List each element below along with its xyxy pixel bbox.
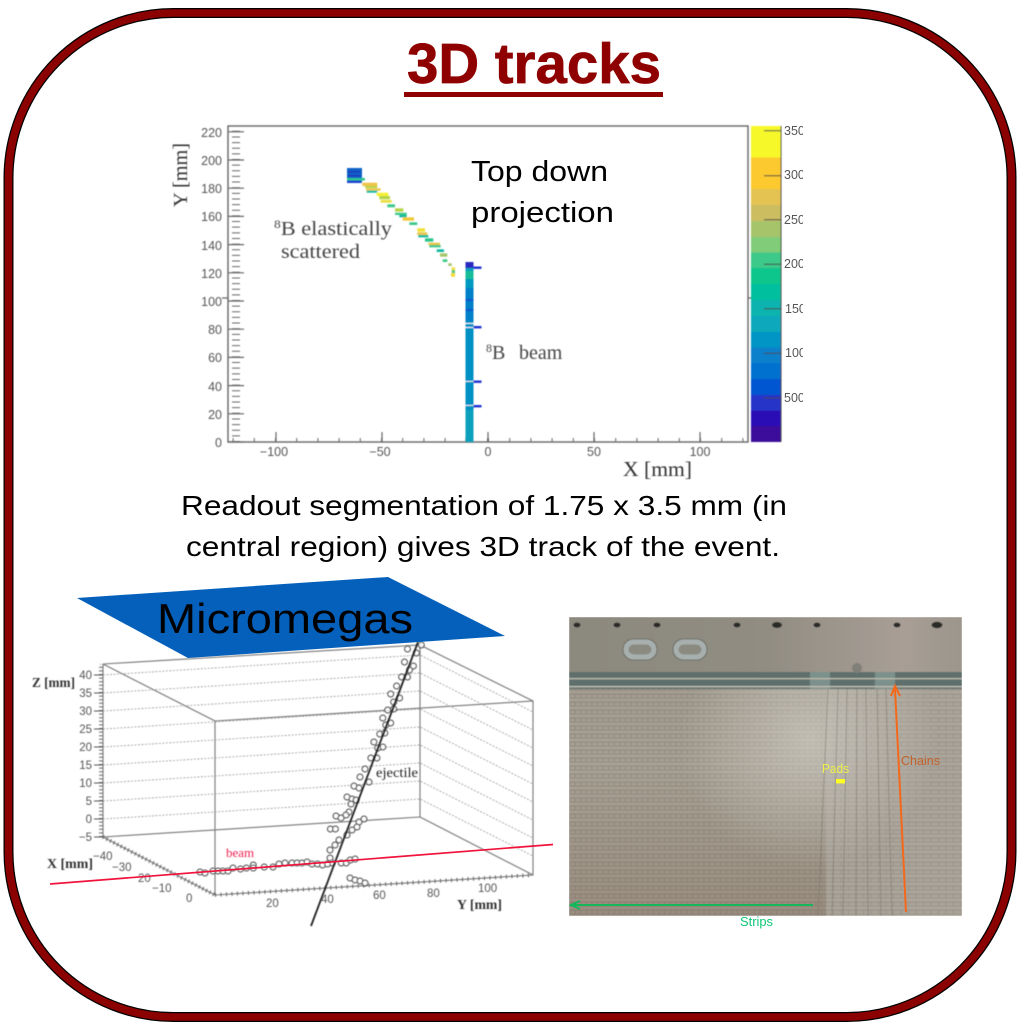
y axis labels: 120	[201, 267, 222, 281]
label: strips: Strips	[740, 914, 773, 929]
x axis title: X [mm]	[623, 457, 692, 481]
x and y axis labels: −10	[152, 883, 172, 895]
y axis labels: 40	[208, 380, 222, 394]
z axis labels: 30	[79, 706, 92, 718]
x axis labels: 0	[485, 445, 492, 459]
beam track	[466, 262, 482, 442]
z axis labels: 20	[79, 742, 92, 754]
y axis labels: 60	[208, 351, 222, 365]
axis titles: X [mm]	[47, 857, 93, 872]
x and y axis labels: 20	[266, 898, 279, 910]
colour scale labels: 2000	[784, 257, 812, 271]
label: 8B beam: B	[492, 342, 505, 364]
title: 3D tracks	[407, 32, 661, 96]
x axis labels: 100	[690, 445, 710, 459]
z axis labels: 5	[86, 796, 92, 808]
label: top down projection: Top down	[471, 156, 608, 188]
x axis labels: 50	[587, 445, 601, 459]
beam line	[50, 844, 553, 884]
x and y axis labels: −30	[112, 862, 132, 874]
y axis labels	[201, 126, 222, 450]
caption: central region) gives 3D track of the event.	[186, 531, 780, 562]
chart: 3D track	[32, 577, 553, 926]
x and y axis labels: 60	[373, 890, 386, 902]
photo: readout plane	[569, 617, 962, 929]
label: top down projection	[471, 156, 614, 229]
x and y axis labels	[93, 851, 497, 910]
chart: top down projection	[170, 124, 813, 481]
y axis labels: 0	[215, 436, 222, 450]
label: 8B elastically scattered	[274, 217, 392, 263]
x and y axis labels: −40	[93, 851, 113, 863]
strips arrow	[571, 901, 813, 909]
label: ejectile: ejectile	[376, 765, 418, 780]
label: 8B beam: beam	[519, 342, 563, 364]
colour scale labels: 3500	[784, 124, 812, 138]
axis titles: Y [mm]	[457, 898, 502, 913]
x axis labels: −50	[369, 445, 391, 459]
micromegas plane	[77, 577, 505, 658]
micromegas plane: Micromegas	[157, 595, 413, 642]
colour scale labels: 3000	[784, 168, 812, 182]
data points	[197, 642, 424, 886]
colour scale labels	[784, 126, 803, 402]
colour scale labels: 500	[784, 391, 805, 405]
3D box wireframe	[94, 645, 533, 895]
z axis labels: 10	[79, 778, 92, 790]
y axis labels: 140	[201, 239, 222, 253]
caption: Readout segmentation of 1.75 x 3.5 mm (in	[181, 490, 787, 521]
label: 8B elastically scattered: 8	[274, 217, 281, 231]
y axis labels: 160	[201, 210, 222, 224]
label: beam: beam	[226, 845, 254, 860]
label: top down projection: projection	[471, 197, 614, 229]
plot frame and axes	[222, 126, 753, 442]
x and y axis labels: 0	[186, 893, 192, 905]
colour scale	[751, 126, 781, 442]
z axis labels: 40	[79, 670, 92, 682]
y axis labels: 180	[201, 182, 222, 196]
label: chains: Chains	[901, 753, 940, 768]
y axis labels: 200	[201, 154, 222, 168]
scattered track	[347, 168, 455, 277]
x axis labels: −100	[260, 445, 288, 459]
photo surface	[569, 617, 962, 916]
chains arrow	[891, 686, 906, 912]
y axis labels: 220	[201, 126, 222, 140]
z axis labels	[79, 670, 92, 844]
z axis labels: 15	[79, 760, 92, 772]
label: 8B beam: 8	[486, 341, 492, 355]
y axis labels: 20	[208, 408, 222, 422]
caption	[181, 490, 787, 562]
colour scale labels: 1000	[785, 346, 813, 360]
z axis labels: 0	[86, 814, 92, 826]
label: pads: Pads	[822, 761, 849, 776]
y axis title: Y [mm]	[170, 143, 192, 207]
z axis labels: 25	[79, 724, 92, 736]
colour scale labels: 1500	[785, 302, 813, 316]
y axis labels: 80	[208, 323, 222, 337]
axis titles	[32, 675, 502, 913]
ejectile line	[311, 642, 418, 926]
label: 8B elastically scattered: B elastically	[281, 218, 392, 240]
pad highlight	[836, 779, 845, 783]
x and y axis labels: 40	[321, 894, 334, 906]
z axis labels: −5	[79, 832, 92, 844]
axis ticks	[99, 664, 103, 837]
label: 8B elastically scattered: scattered	[281, 241, 360, 263]
x and y axis labels: 100	[478, 883, 497, 895]
y axis labels: 100	[201, 295, 222, 309]
axis titles: Z [mm]	[32, 675, 75, 690]
x axis labels	[260, 445, 710, 459]
colour scale labels: 2500	[784, 213, 812, 227]
x and y axis labels: 80	[427, 888, 440, 900]
z axis labels: 35	[79, 688, 92, 700]
x and y axis labels: 20	[138, 873, 151, 885]
